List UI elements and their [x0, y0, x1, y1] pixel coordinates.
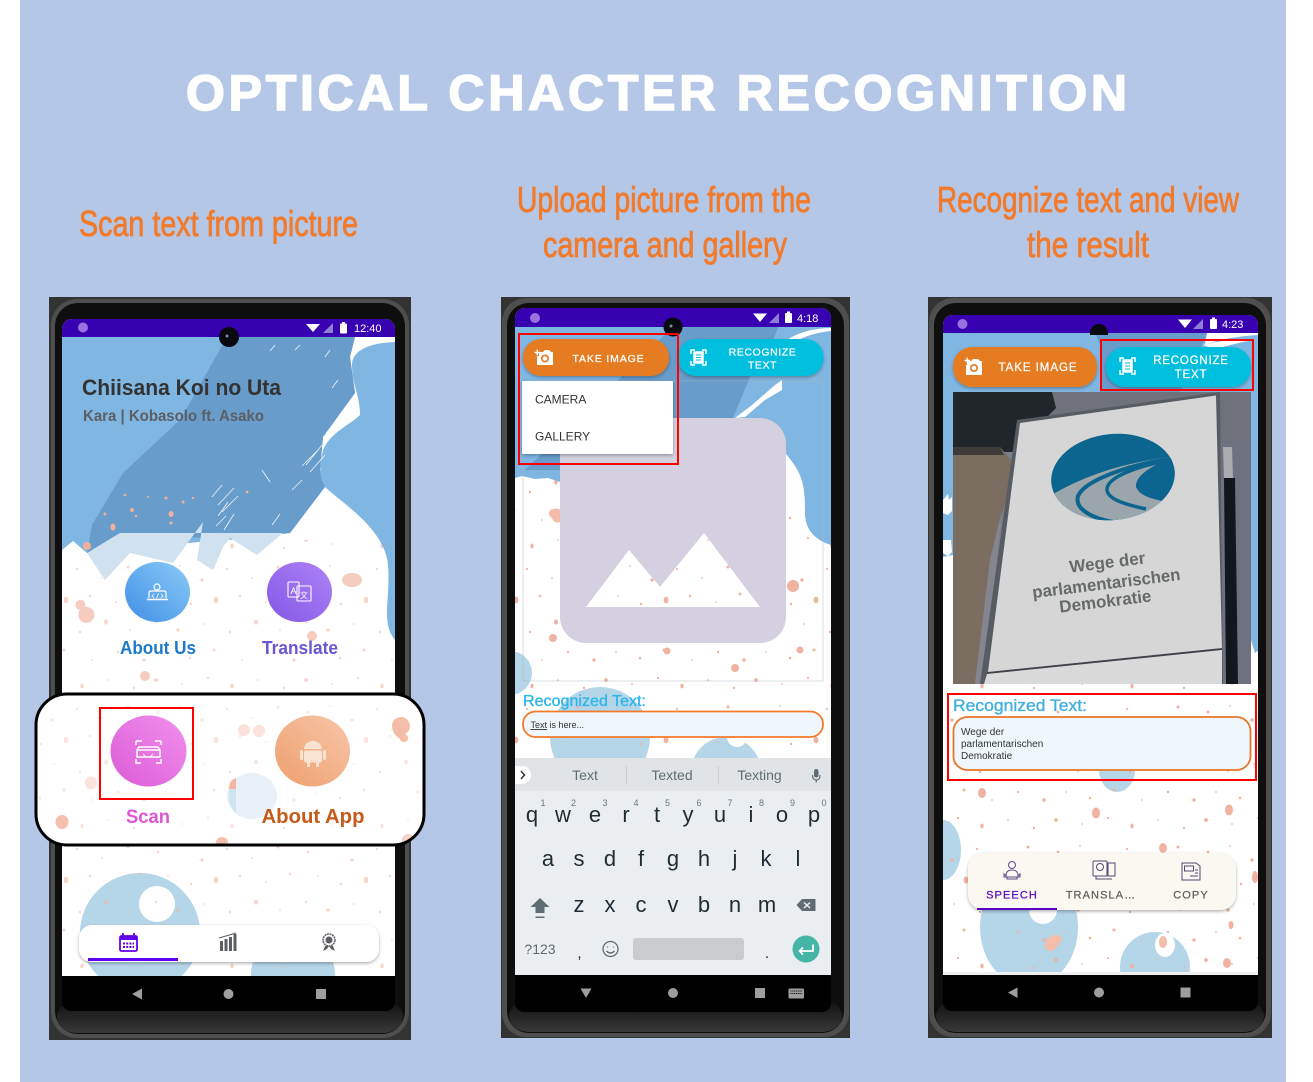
keyboard: i: [749, 802, 753, 827]
navigation bar: [515, 975, 831, 1012]
front camera: [1090, 324, 1108, 335]
keyboard: e: [589, 802, 601, 827]
keyboard: d: [604, 846, 616, 871]
button: about app: About App: [262, 806, 364, 828]
keyboard: v: [668, 892, 678, 917]
text field: Text is here...: [530, 720, 584, 730]
button: translate: 文: [300, 590, 308, 600]
button: recognize text: RECOGNIZE: [1153, 355, 1229, 367]
button: scan: Scan: [126, 807, 170, 828]
keyboard: 0: [821, 798, 827, 808]
keyboard: 2: [571, 798, 576, 808]
action tab bar: [968, 853, 1236, 910]
navigation bar: [943, 975, 1258, 1011]
keyboard: b: [698, 892, 710, 917]
keyboard: 1: [540, 798, 546, 808]
button: about us: [120, 562, 196, 658]
keyboard: l: [796, 846, 800, 871]
song artist: Kara | Kobasolo ft. Asako: [83, 408, 264, 425]
status bar: [943, 315, 1258, 333]
button: recognize text: [1106, 347, 1251, 387]
keyboard: p: [808, 802, 820, 827]
keyboard: 9: [790, 798, 795, 808]
icon: emoji: [603, 942, 618, 956]
heading: upload picture: [517, 179, 811, 265]
highlight box: scan: [100, 708, 193, 799]
icon: copy: [1182, 863, 1200, 880]
phone 2: upload screen: [488, 297, 850, 1038]
keyboard: o: [776, 802, 788, 827]
button: take image: [523, 339, 669, 376]
status bar: [515, 308, 831, 327]
highlight box: recognize: [1101, 340, 1253, 390]
keyboard: 6: [696, 798, 702, 808]
keyboard: ?123: [524, 941, 556, 957]
keyboard: [515, 758, 831, 975]
keyboard: w: [554, 802, 571, 827]
icon: backspace: [796, 899, 816, 911]
sign photograph: [953, 392, 1251, 684]
heading: scan text: Scan text from picture: [79, 203, 358, 244]
action tab bar: SPEECH: [986, 890, 1038, 902]
keyboard: n: [729, 892, 741, 917]
suggestion strip: Texted: [651, 767, 693, 783]
button: translate: A: [290, 586, 297, 596]
icon: shift: [530, 898, 550, 918]
sign text: Demokratie: [1058, 586, 1152, 617]
bottom tab bar: [79, 925, 379, 962]
suggestion strip: Text: [572, 767, 598, 783]
keyboard: u: [714, 802, 726, 827]
icon: camera: [534, 350, 553, 365]
button: take image: TAKE IMAGE: [573, 353, 644, 365]
suggestion strip: [515, 758, 831, 791]
sign text: [1033, 553, 1180, 612]
button: about us: About Us: [120, 638, 196, 658]
result text field: Wege der: [961, 727, 1005, 738]
keyboard: 8: [759, 798, 764, 808]
heading: upload picture: camera and gallery: [543, 224, 787, 265]
keyboard: 7: [727, 798, 733, 808]
popup menu: CAMERA: [535, 392, 586, 406]
popup menu: GALLERY: [535, 430, 590, 444]
suggestion strip: Texting: [737, 767, 782, 783]
keyboard: c: [636, 892, 646, 917]
status bar: 12:40: [354, 323, 382, 335]
heading: recognize text: [937, 179, 1240, 265]
status bar: [62, 319, 395, 337]
keyboard: f: [638, 846, 645, 871]
button: translate: Translate: [262, 638, 338, 658]
button: recognize text: RECOGNIZE: [729, 346, 796, 358]
space bar: [633, 938, 744, 960]
callout: scan and about app: [36, 694, 424, 847]
keyboard: z: [574, 892, 584, 917]
highlight box: result: [948, 694, 1256, 780]
icon: scan document: [691, 350, 706, 365]
sign text: parlamentarischen: [1031, 565, 1181, 602]
label: recognized text: Recognized Text:: [953, 696, 1087, 715]
icon: calendar: [120, 933, 137, 951]
keyboard: h: [698, 846, 710, 871]
keyboard: x: [604, 892, 616, 917]
button: translate: [262, 562, 338, 658]
keyboard: m: [758, 892, 776, 917]
result text field: [954, 717, 1250, 770]
keyboard: .: [765, 945, 769, 962]
popup menu: [522, 381, 673, 454]
phone 3: result screen: [925, 297, 1272, 1038]
button: about app: [262, 716, 364, 828]
front camera: [219, 327, 239, 347]
keyboard: g: [667, 846, 679, 871]
status bar: 4:23: [1222, 319, 1243, 331]
label: recognized text: Recognized Text:: [523, 693, 646, 710]
text field: [523, 712, 823, 737]
icon: bar chart: [219, 933, 236, 951]
keyboard: 5: [665, 798, 670, 808]
sign text: Wege der: [1068, 548, 1147, 577]
keyboard: s: [574, 846, 584, 871]
keyboard: a: [542, 846, 555, 871]
keyboard: r: [622, 802, 630, 827]
icon: scan document: [1120, 358, 1135, 374]
button: recognize text: TEXT: [1175, 369, 1207, 381]
phone 1: home screen: [49, 297, 411, 1040]
icon: speech: [1004, 862, 1020, 879]
keyboard: t: [654, 802, 660, 827]
song title: Chiisana Koi no Uta: [82, 375, 282, 400]
icon: camera: [964, 358, 982, 375]
keyboard: ,: [577, 945, 582, 962]
action tab bar: COPY: [1173, 890, 1209, 902]
keyboard: k: [760, 846, 772, 871]
action tab bar: TRANSLA…: [1066, 890, 1136, 902]
front camera: [664, 318, 682, 336]
logo: [1051, 434, 1175, 520]
result text field: parlamentarischen: [961, 739, 1043, 750]
result text field: Demokratie: [961, 751, 1013, 762]
image frame: [523, 381, 823, 681]
highlight box: take image: [519, 334, 678, 464]
enter key: [792, 936, 820, 962]
title: OPTICAL CHACTER RECOGNITION: [186, 65, 1127, 121]
button: scan: [110, 716, 186, 828]
status bar: 4:18: [797, 313, 818, 325]
image placeholder: [560, 418, 786, 643]
heading: recognize text: the result: [1027, 224, 1149, 265]
icon: ribbon award: [323, 934, 335, 951]
keyboard: y: [682, 802, 694, 827]
heading: upload picture: Upload picture from the: [517, 179, 811, 220]
keyboard: 3: [602, 798, 608, 808]
keyboard: j: [732, 846, 737, 871]
button: recognize text: TEXT: [748, 360, 777, 372]
keyboard: 4: [633, 798, 639, 808]
button: take image: [953, 347, 1097, 387]
button: take image: TAKE IMAGE: [999, 362, 1077, 374]
keyboard: q: [526, 802, 538, 827]
icon: translate book: [1093, 861, 1115, 879]
navigation bar: [62, 976, 395, 1011]
button: recognize text: [678, 339, 824, 376]
